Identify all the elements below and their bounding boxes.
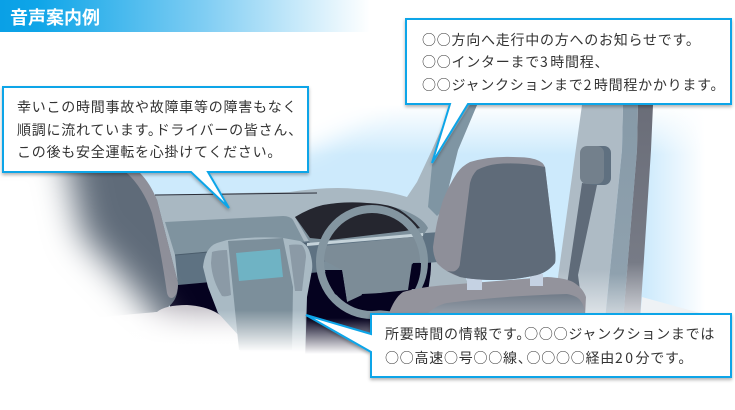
headrest xyxy=(433,157,556,280)
dash trim line xyxy=(307,233,423,246)
A pillar inner strip xyxy=(428,105,477,216)
headrest posts xyxy=(467,278,482,290)
callout: left: この後も安全運転を心掛けてください。 xyxy=(17,142,282,162)
dark floor xyxy=(170,240,450,370)
centre console xyxy=(203,237,312,365)
steering wheel xyxy=(320,209,424,315)
callout: top right: ○○インターまで3時間程、 xyxy=(422,52,609,72)
dashboard top and hood xyxy=(150,105,477,290)
navigation screen xyxy=(236,249,283,281)
heading: 音声案内例 xyxy=(10,4,100,30)
dashboard centre panel xyxy=(165,216,305,255)
lower door area xyxy=(428,235,470,292)
callout: left: 幸いこの時間事故や故障車等の障害もなく xyxy=(17,97,297,117)
callout: bottom right: ○○高速○号○○線、○○○○経由20分です。 xyxy=(385,348,693,368)
seat belt xyxy=(566,146,611,290)
callout: top right: ○○ジャンクションまで2時間程かかります。 xyxy=(422,75,725,95)
callout: left xyxy=(3,87,308,208)
instrument binnacle xyxy=(295,202,428,243)
seat cushion xyxy=(0,305,245,370)
callout: left: 順調に流れています。ドライバーの皆さん、 xyxy=(17,120,303,140)
fade overlays xyxy=(0,140,165,380)
header band xyxy=(0,0,370,32)
sky through windshield xyxy=(60,105,735,155)
callout: bottom right xyxy=(306,314,731,377)
left seat xyxy=(0,173,178,326)
right pillar xyxy=(552,105,700,320)
callout: top right xyxy=(406,19,731,163)
dashboard lower strip xyxy=(175,232,440,285)
callout: bottom right: 所要時間の情報です。○○○ジャンクションまでは xyxy=(385,324,715,344)
right seat xyxy=(388,157,586,316)
callout: top right: ○○方向へ走行中の方へのお知らせです。 xyxy=(422,30,701,50)
seat back xyxy=(388,277,586,316)
